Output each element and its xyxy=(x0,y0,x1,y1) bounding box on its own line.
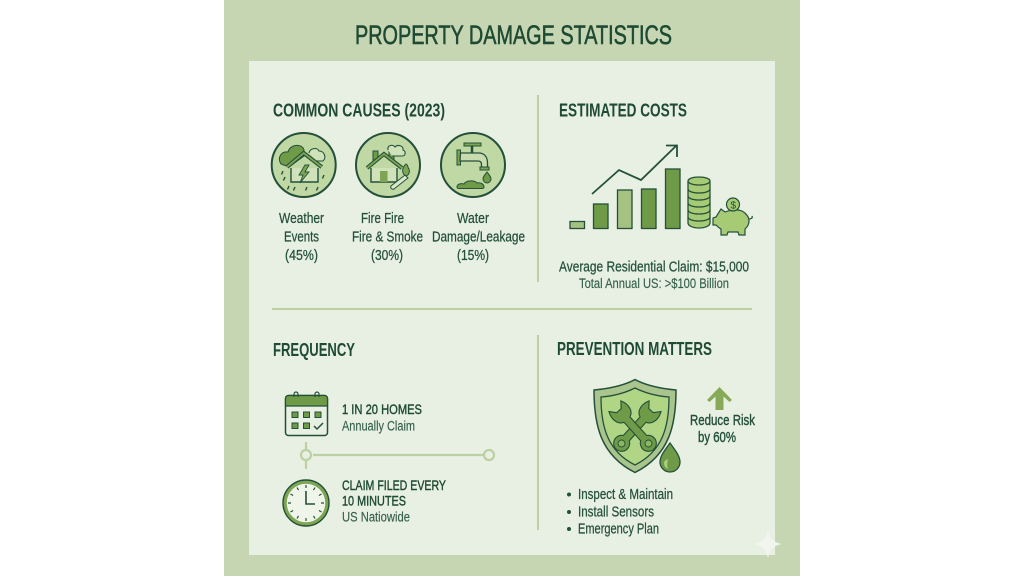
heading: common causes: COMMON CAUSES (2023) xyxy=(273,100,445,120)
label: water damage: (15%) xyxy=(457,248,489,264)
outer background panel xyxy=(224,0,800,576)
label: fire and smoke: Fire & Smoke xyxy=(352,230,423,246)
stat: claim filed: 10 MINUTES xyxy=(342,494,406,508)
label: weather events: Weather xyxy=(279,211,324,227)
heading: estimated costs: ESTIMATED COSTS xyxy=(559,100,687,120)
bar chart xyxy=(570,169,680,228)
callout: reduce risk: Reduce Risk xyxy=(690,413,756,429)
icon: sparkle xyxy=(754,530,782,558)
icon: water drop xyxy=(660,443,680,472)
heading: frequency: FREQUENCY xyxy=(273,340,355,360)
label: water damage: Damage/Leakage xyxy=(432,230,525,246)
stat: claim filed: CLAIM FILED EVERY xyxy=(342,478,446,493)
icon: piggy bank xyxy=(713,198,752,235)
label: fire and smoke: (30%) xyxy=(371,248,403,264)
panel: estimated costs xyxy=(559,100,752,291)
icon: up arrow xyxy=(707,387,732,410)
connector xyxy=(301,442,494,469)
icon: fire and smoke xyxy=(356,133,420,197)
list: prevention steps: Emergency Plan xyxy=(578,522,659,538)
icon: shield with wrenches xyxy=(594,380,676,472)
heading: prevention matters: PREVENTION MATTERS xyxy=(557,339,712,359)
inner content panel xyxy=(249,61,775,555)
label: fire and smoke xyxy=(352,211,423,264)
label: water damage xyxy=(432,211,525,264)
icon: weather events xyxy=(272,133,336,197)
icon: water tap xyxy=(441,133,505,197)
icon: calendar xyxy=(286,392,328,436)
panel: frequency xyxy=(273,340,494,526)
text: total annual: Total Annual US: >$100 Billion xyxy=(579,276,729,291)
icon: piggy bank: $ xyxy=(730,200,736,212)
icon: clock xyxy=(283,480,329,526)
callout: reduce risk xyxy=(690,413,756,446)
label: water damage: Water xyxy=(457,211,489,227)
icon: coin stack xyxy=(688,177,710,228)
stat: claim filed xyxy=(342,478,446,524)
label: weather events: Events xyxy=(284,230,319,246)
text: average claim: Average Residential Claim: $15,000 xyxy=(559,260,749,276)
label: weather events xyxy=(279,211,324,264)
label: fire and smoke: Fire Fire xyxy=(361,211,404,227)
list: prevention steps: Inspect & Maintain xyxy=(578,487,673,503)
callout: reduce risk: by 60% xyxy=(698,430,736,446)
panel: common causes xyxy=(272,100,525,264)
stat: claim filed: US Natiowide xyxy=(342,510,410,524)
panel: prevention matters xyxy=(557,339,756,538)
label: weather events: (45%) xyxy=(285,248,318,264)
stat: 1 in 20 homes: Annually Claim xyxy=(342,418,415,434)
list: prevention steps xyxy=(567,487,673,538)
title: PROPERTY DAMAGE STATISTICS xyxy=(355,20,672,50)
stat: 1 in 20 homes: 1 IN 20 HOMES xyxy=(342,402,422,417)
list: prevention steps: Install Sensors xyxy=(578,504,654,520)
trend arrow xyxy=(592,145,677,194)
stat: 1 in 20 homes xyxy=(342,402,422,434)
